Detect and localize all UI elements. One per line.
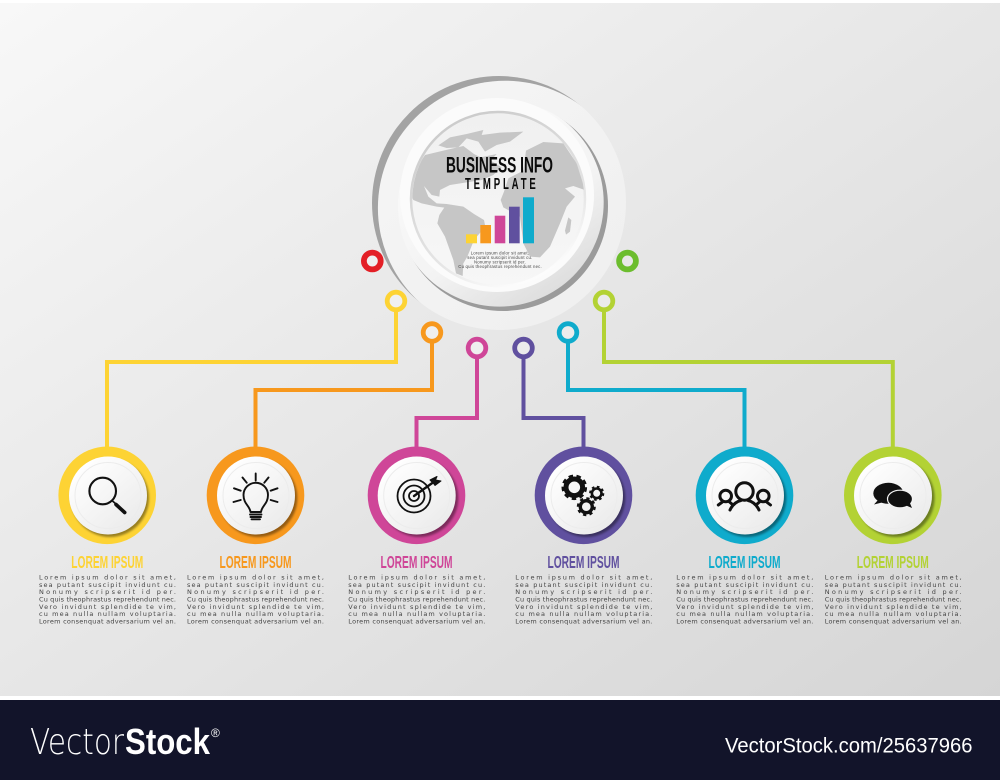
body text: Nonumy scripserit id per. [187,588,324,596]
body text [676,574,813,626]
footer logo: Stock: Stock [125,721,211,762]
disc [69,456,147,534]
outer pale disc [372,76,626,330]
footer logo: Vector: Vector [30,722,124,763]
left grey crescent [372,76,579,302]
body text: sea putant suscipit invidunt cu. [187,581,324,589]
body text: cu mea nulla nullam voluptaria. [676,610,813,618]
step 2: orange idea [187,446,324,626]
body text [515,574,652,626]
body text: Vero invidunt splendide te vim, [515,603,652,611]
connector: orange [256,324,441,450]
connector: pink [416,339,486,450]
heading: LOREM IPSUM [220,552,292,572]
connector: yellow [107,292,405,450]
disc inner line [223,462,289,528]
world map [410,130,585,276]
body text: Cu quis theophrastus reprehendunt nec. [825,596,962,604]
connector: lime [595,292,893,450]
icon: gears [563,476,603,515]
icon: people [718,483,770,510]
body text: Lorem consenquat adversarium vel an. [676,618,813,626]
disc [217,456,295,534]
icon: magnifier [89,478,125,512]
disc inner line [384,462,450,528]
connector: purple [515,339,584,450]
body text: Cu quis theophrastus reprehendunt nec. [187,596,324,604]
body text: cu mea nulla nullam voluptaria. [39,610,176,618]
body text: Vero invidunt splendide te vim, [348,603,485,611]
ring [696,446,793,544]
disc [545,456,623,534]
globe caption: Lorem ipsum dolor sit amet, [471,250,529,256]
body text: cu mea nulla nullam voluptaria. [515,610,652,618]
body text: cu mea nulla nullam voluptaria. [187,610,324,618]
disc inner line [712,462,778,528]
disc inner line [860,462,926,528]
heading: LOREM IPSUM [708,552,780,572]
heading: LOREM IPSUM [71,552,143,572]
body text: Lorem ipsum dolor sit amet, [348,574,485,582]
disc shadow [547,459,625,537]
body text: Vero invidunt splendide te vim, [39,603,176,611]
heading: LOREM IPSUM [380,552,452,572]
ring [207,446,304,544]
body text: Lorem ipsum dolor sit amet, [187,574,324,582]
disc shadow [708,459,786,537]
body text: Lorem ipsum dolor sit amet, [825,574,962,582]
body text: Lorem ipsum dolor sit amet, [676,574,813,582]
step 5: blue team [676,446,813,626]
disc shadow [857,459,935,537]
connector: blue [559,324,744,450]
body text: Cu quis theophrastus reprehendunt nec. [515,596,652,604]
body text: sea putant suscipit invidunt cu. [348,581,485,589]
body text: Lorem consenquat adversarium vel an. [39,618,176,626]
body text: sea putant suscipit invidunt cu. [676,581,813,589]
central globe badge [372,76,626,330]
right grey crescent [414,119,608,311]
body text: sea putant suscipit invidunt cu. [825,581,962,589]
body text: Cu quis theophrastus reprehendunt nec. [348,596,485,604]
globe disc [411,112,585,286]
body text: cu mea nulla nullam voluptaria. [825,610,962,618]
disc [706,456,784,534]
body text: sea putant suscipit invidunt cu. [515,581,652,589]
body text: cu mea nulla nullam voluptaria. [348,610,485,618]
disc [378,456,456,534]
disc [854,456,932,534]
heading: LOREM IPSUM [857,552,929,572]
step 4: purple gears [515,446,652,626]
disc shadow [380,459,458,537]
body text: Lorem ipsum dolor sit amet, [39,574,176,582]
body text: Vero invidunt splendide te vim, [676,603,813,611]
body text: Nonumy scripserit id per. [348,588,485,596]
body text: Lorem consenquat adversarium vel an. [187,618,324,626]
body text: Nonumy scripserit id per. [825,588,962,596]
ring [368,446,465,544]
body text [348,574,485,626]
body text: Vero invidunt splendide te vim, [825,603,962,611]
registered mark: ® [211,726,220,740]
body text: Cu quis theophrastus reprehendunt nec. [39,596,176,604]
disc inner line [75,462,141,528]
extra node: red ring [364,253,381,269]
step 6: lime chat [825,446,962,626]
body text [825,574,962,626]
body text: Lorem ipsum dolor sit amet, [515,574,652,582]
ring [535,446,632,544]
disc inner line [551,462,617,528]
body text: Vero invidunt splendide te vim, [187,603,324,611]
icon: speech bubbles [873,483,912,508]
body text: Lorem consenquat adversarium vel an. [825,618,962,626]
globe caption: sea putant suscipit invidunt cu. [467,255,532,260]
title line one: BUSINESS INFO [446,152,553,178]
step 3: pink target [348,446,485,626]
body text: Nonumy scripserit id per. [39,588,176,596]
globe caption: Cu quis theophrastus reprehendunt nec. [458,264,542,269]
globe caption [458,250,542,269]
body text [39,574,176,626]
globe title [446,152,553,192]
body text: Cu quis theophrastus reprehendunt nec. [676,596,813,604]
footer bar [0,700,1000,780]
middle disc [398,101,608,311]
step 1: yellow search [39,446,176,626]
disc shadow [71,459,149,537]
globe caption: Nonumy scripserit id per. [474,260,526,264]
footer id: VectorStock.com/25637966 [725,734,972,758]
body text: sea putant suscipit invidunt cu. [39,581,176,589]
ring [844,446,942,544]
bar chart [466,197,534,243]
disc shadow [219,459,297,537]
icon: target [398,476,441,512]
white inner disc [400,98,594,292]
heading: LOREM IPSUM [548,552,620,572]
body text: Nonumy scripserit id per. [676,588,813,596]
icon: light bulb [234,474,278,519]
title line two: TEMPLATE [465,174,536,192]
body text: Nonumy scripserit id per. [515,588,652,596]
ring [58,446,156,544]
body text: Lorem consenquat adversarium vel an. [515,618,652,626]
body text [187,574,324,626]
body text: Lorem consenquat adversarium vel an. [348,618,485,626]
extra node: green ring [619,253,636,269]
